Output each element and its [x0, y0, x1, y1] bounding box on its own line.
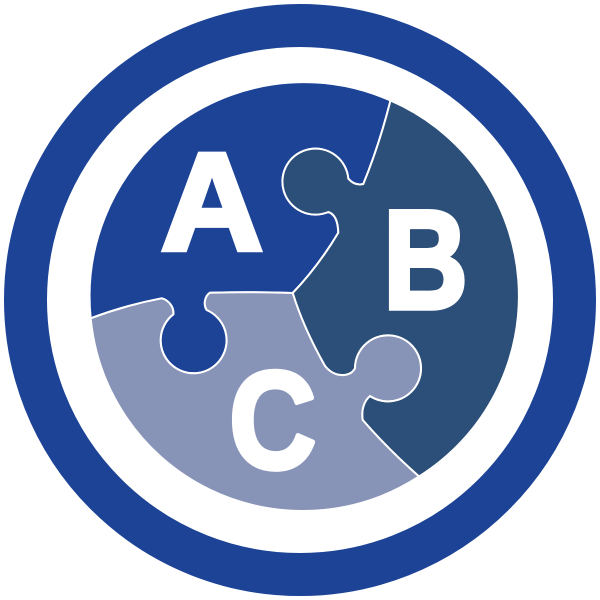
puzzle piece A: [90, 82, 391, 373]
puzzle piece C: [91, 292, 421, 511]
letter B: B: [383, 182, 468, 339]
puzzle piece B: [282, 100, 519, 476]
letter C: C: [229, 342, 316, 498]
letter A: A: [161, 124, 263, 280]
